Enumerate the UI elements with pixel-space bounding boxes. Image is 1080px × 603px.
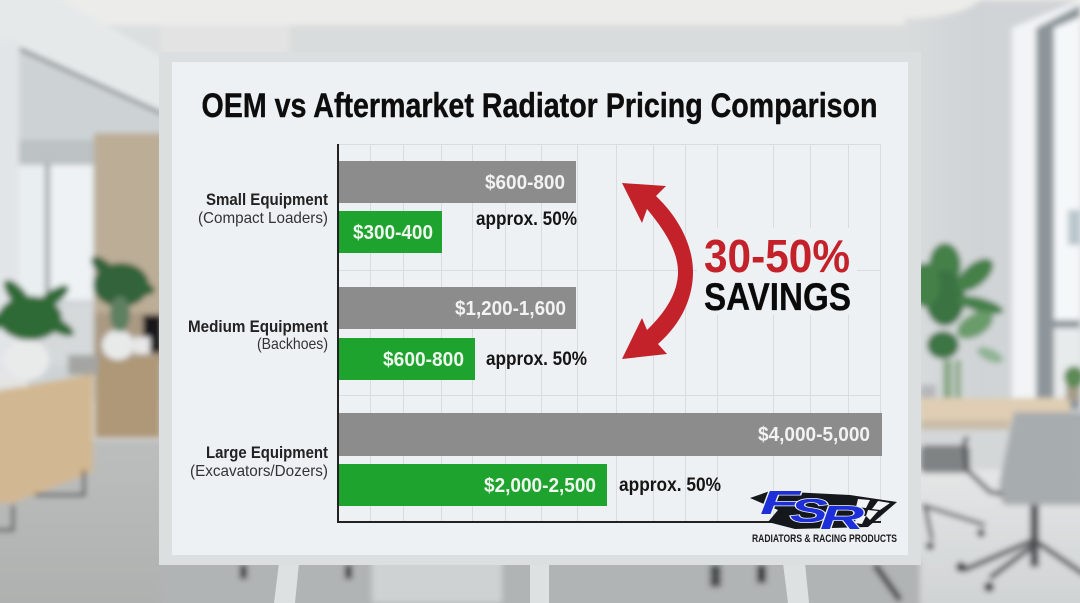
bar: aftermarket small <box>339 211 442 253</box>
value: OEM small: $600-800 <box>485 172 565 194</box>
logo letter F: F <box>760 484 802 521</box>
left wall header <box>0 0 170 115</box>
backing of savings text <box>697 228 857 315</box>
glass room <box>19 50 165 400</box>
group: medium equipment <box>188 287 587 380</box>
floor <box>0 440 170 603</box>
group: small equipment <box>198 161 577 253</box>
bar: aftermarket medium <box>339 338 475 380</box>
arrow: double-headed curved savings arrow <box>622 183 693 359</box>
label: small equipment: Small Equipment <box>206 190 328 209</box>
ceiling <box>0 0 1080 25</box>
sublabel: compact loaders: (Compact Loaders) <box>198 210 328 227</box>
chart grid <box>338 144 881 522</box>
sublabel: backhoes: (Backhoes) <box>257 336 328 353</box>
value: OEM medium: $1,200-1,600 <box>455 298 566 320</box>
chart axes <box>338 144 881 522</box>
title: OEM vs Aftermarket Radiator Pricing Comparison <box>202 87 878 125</box>
sublabel: excavators/dozers: (Excavators/Dozers) <box>190 463 328 480</box>
plants left <box>5 340 49 380</box>
floor right <box>915 470 1080 603</box>
bar: OEM medium <box>339 287 576 329</box>
front cabinet <box>0 374 93 503</box>
chair behind <box>920 385 936 398</box>
label: large equipment: Large Equipment <box>206 443 328 462</box>
logo letter R: R <box>820 499 864 536</box>
bar: OEM large <box>339 413 882 456</box>
savings percentage: 30-50% <box>704 230 850 282</box>
desk <box>920 398 1070 422</box>
chair front <box>1000 412 1080 505</box>
savings label: SAVINGS <box>704 276 851 319</box>
floor below board <box>160 560 920 603</box>
bar: aftermarket large <box>339 464 607 506</box>
value: aftermarket small: $300-400 <box>353 222 433 244</box>
note: large: approx. 50% <box>619 475 721 496</box>
value: aftermarket large: $2,000-2,500 <box>484 475 596 497</box>
note: medium: approx. 50% <box>486 349 587 370</box>
logo swoosh <box>750 491 897 529</box>
value: OEM large: $4,000-5,000 <box>758 424 870 446</box>
easel legs <box>274 563 809 603</box>
label: medium equipment: Medium Equipment <box>188 317 328 336</box>
logo checker flag <box>855 499 890 524</box>
whiteboard frame <box>159 52 921 565</box>
logo letter S: S <box>790 492 828 529</box>
logo tagline: RADIATORS & RACING PRODUCTS <box>752 533 897 545</box>
bar: OEM small <box>339 161 576 203</box>
note: small: approx. 50% <box>476 209 577 230</box>
right wall <box>905 0 1015 410</box>
value: aftermarket medium: $600-800 <box>383 349 464 371</box>
group: large equipment <box>190 413 882 506</box>
rear cabinet <box>95 358 161 438</box>
logo: FSR <box>750 484 897 545</box>
plant right <box>910 243 1005 366</box>
